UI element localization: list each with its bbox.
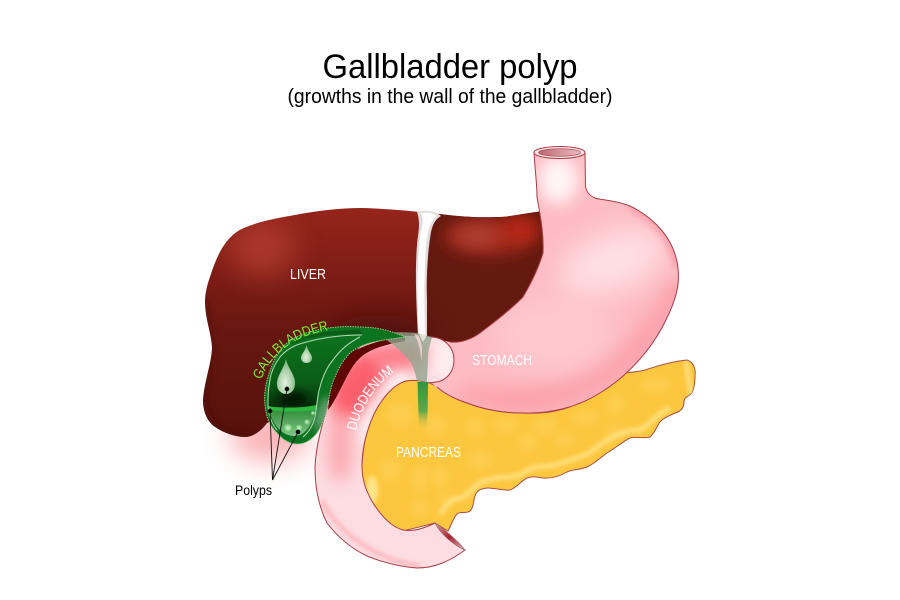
stomach [430,152,690,418]
liver label: LIVER [290,266,326,283]
gallbladder wall shading [310,394,330,434]
duodenum [315,336,465,568]
pancreas [362,360,695,531]
esophagus opening [534,146,585,158]
falciform ligament [416,211,441,336]
bile duct [385,332,432,430]
polyp pointer lines [268,387,300,480]
gallbladder [265,327,405,444]
pancreas lower edge highlight [440,408,670,515]
duodenum cut end [435,523,465,550]
infographic canvas [203,53,696,568]
gallbladder shadow on liver [328,336,405,410]
pancreas lobules [380,377,671,518]
red glow under gallbladder [230,410,310,462]
liver [203,205,566,437]
stomach label: STOMACH [472,352,532,369]
duodenum label: DUODENUM [346,365,394,430]
gallbladder label: GALLBLADDER [254,321,328,378]
pancreas label: PANCREAS [396,444,461,461]
small bile drop [301,345,312,363]
bile layer [270,410,315,436]
polyps label: Polyps [235,482,272,498]
subtitle: (growths in the wall of the gallbladder) [288,86,612,108]
gallbladder lumen [268,350,339,407]
large bile drop [277,359,295,394]
polyp growths [284,411,315,432]
title: Gallbladder polyp [322,48,578,86]
gallbladder inner wall line [268,335,362,437]
